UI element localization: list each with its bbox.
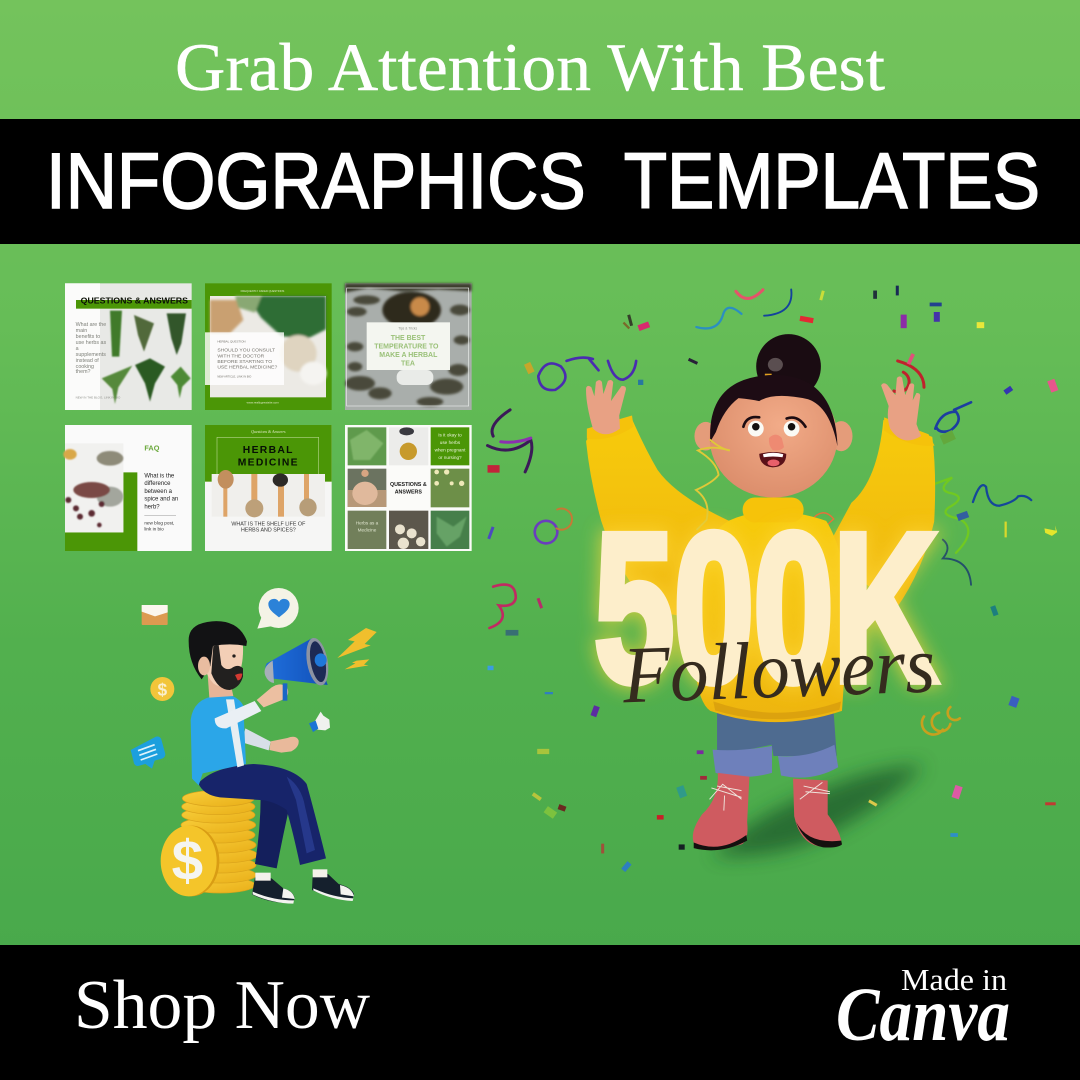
icon: dollar coin xyxy=(150,677,174,701)
bottom black band xyxy=(0,945,1080,1080)
trousers xyxy=(255,795,291,868)
thumbnail: should you consult xyxy=(205,283,332,410)
thumbnail: should you consult: HERBAL QUESTION xyxy=(217,340,246,344)
made in canva: Canva xyxy=(836,973,1010,1057)
thumbnail: herbal medicine: MEDICINE xyxy=(238,458,299,469)
megaphone xyxy=(265,636,332,687)
thumbnail: photo collage: Herbs as a xyxy=(356,520,379,525)
confetti ribbons xyxy=(488,289,1031,735)
front arm xyxy=(215,701,261,728)
thumbnail: questions and answers: main xyxy=(76,328,87,334)
thumbnail: should you consult: www.reallygreatsite.com xyxy=(247,400,279,404)
thumbnail: photo collage: Medicine xyxy=(358,527,377,532)
thumbnail: faq: new blog post, xyxy=(144,521,174,526)
neck and head xyxy=(207,670,233,698)
thumbnail: questions and answers: QUESTIONS & ANSWERS xyxy=(81,296,188,306)
made in canva: Made in xyxy=(901,962,1008,997)
back arm xyxy=(242,728,271,750)
thumbnail: faq xyxy=(63,425,192,551)
thumbnail: best temperature xyxy=(345,283,472,410)
thumbnail: should you consult: NEW ARTICLE, LINK IN BIO xyxy=(217,374,251,378)
illustration: woman celebrating with confetti xyxy=(487,286,1058,872)
thumbnail: photo collage: ANSWERS xyxy=(395,489,422,495)
thumbnail: herbal medicine: HERBS AND SPICES? xyxy=(241,528,296,534)
thumbnail: best temperature: Tips & Tricks xyxy=(398,326,417,330)
thumbnail: herbal medicine xyxy=(205,425,332,551)
thumbnail: faq: FAQ xyxy=(144,443,160,452)
thumbnail: questions and answers: supplements xyxy=(76,352,106,358)
icon: lightning bolts xyxy=(337,628,377,669)
thumbnail: faq: herb? xyxy=(144,504,160,510)
thumbnail: questions and answers: What are the xyxy=(76,322,106,328)
thumbnail: questions and answers xyxy=(65,283,192,410)
thumbnail: should you consult: SHOULD YOU CONSULT xyxy=(217,348,275,354)
thumbnail: herbal medicine: HERBAL xyxy=(243,445,294,456)
thumbnail: best temperature: TEA xyxy=(401,360,415,367)
thumbnail: should you consult: FREQUENTLY ASKED QUESTIONS xyxy=(241,289,284,293)
thumbnail: photo collage xyxy=(345,425,472,551)
confetti pieces xyxy=(487,286,1058,872)
thumbnail: photo collage: when pregnant xyxy=(435,448,466,453)
shirt xyxy=(191,696,246,785)
ribbons over figure xyxy=(696,440,730,529)
thumbnail: herbal medicine: Questions & Answers xyxy=(251,429,286,434)
shop now: Shop Now xyxy=(74,967,370,1044)
icon: message bubble xyxy=(131,737,165,769)
thumbnail: questions and answers: cooking xyxy=(76,364,94,370)
thumbnail: questions and answers: use herbs as xyxy=(76,340,107,346)
icon: dollar coin: $ xyxy=(158,680,168,700)
thumbnail: best temperature: MAKE A HERBAL xyxy=(379,352,438,359)
thumbnail: faq: between a xyxy=(144,489,173,495)
thumbnail: questions and answers: instead of xyxy=(76,358,99,364)
woman: sweater xyxy=(586,415,935,722)
thumbnail: should you consult: BEFORE STARTING TO xyxy=(217,359,272,365)
thumbnail: faq: What is the xyxy=(144,473,175,479)
thumbnail: photo collage: use herbs xyxy=(440,440,461,445)
thumbnail: photo collage: or nursing? xyxy=(438,455,462,460)
thumbnail: herbal medicine: WHAT IS THE SHELF LIFE OF xyxy=(231,522,306,528)
woman: legs and shorts xyxy=(693,713,842,850)
thumbnail: questions and answers: NEW IN THE BLOG, LINK IN BIO xyxy=(76,395,121,399)
thumbnail: questions and answers: a xyxy=(76,346,79,352)
woman: head xyxy=(694,334,853,497)
thumbnail: photo collage: Is it okay to xyxy=(438,433,462,438)
thumbnail: faq: link in bio xyxy=(144,527,164,532)
thumbnail: questions and answers: benefits to xyxy=(76,334,100,340)
thumbnail: faq: difference xyxy=(144,481,171,487)
illustration: man with megaphone on coins xyxy=(131,588,377,904)
black title band xyxy=(0,119,1080,244)
icon: heart speech bubble xyxy=(257,588,299,629)
thumbnail: should you consult: WITH THE DOCTOR xyxy=(217,353,265,359)
man figure xyxy=(189,621,354,904)
icon: thumbs up xyxy=(309,712,330,732)
thumbnail: photo collage: QUESTIONS & xyxy=(390,482,427,488)
ground shadow xyxy=(713,765,924,856)
thumbnail: questions and answers: them? xyxy=(76,369,91,375)
thumbnail: should you consult: USE HERBAL MEDICINE? xyxy=(217,365,277,371)
coin stack xyxy=(161,790,258,896)
template thumbnails grid xyxy=(63,283,472,551)
woman: hands xyxy=(586,376,921,440)
dollar sign: $ xyxy=(172,830,203,893)
thumbnail: best temperature: THE BEST xyxy=(391,335,426,342)
top heading: Grab Attention With Best xyxy=(175,29,885,105)
thumbnail: best temperature: TEMPERATURE TO xyxy=(374,343,439,350)
thumbnail: faq: spice and an xyxy=(144,497,178,503)
shoes xyxy=(252,878,295,903)
Followers script: Followers xyxy=(620,621,936,720)
icon: envelope xyxy=(142,605,168,625)
